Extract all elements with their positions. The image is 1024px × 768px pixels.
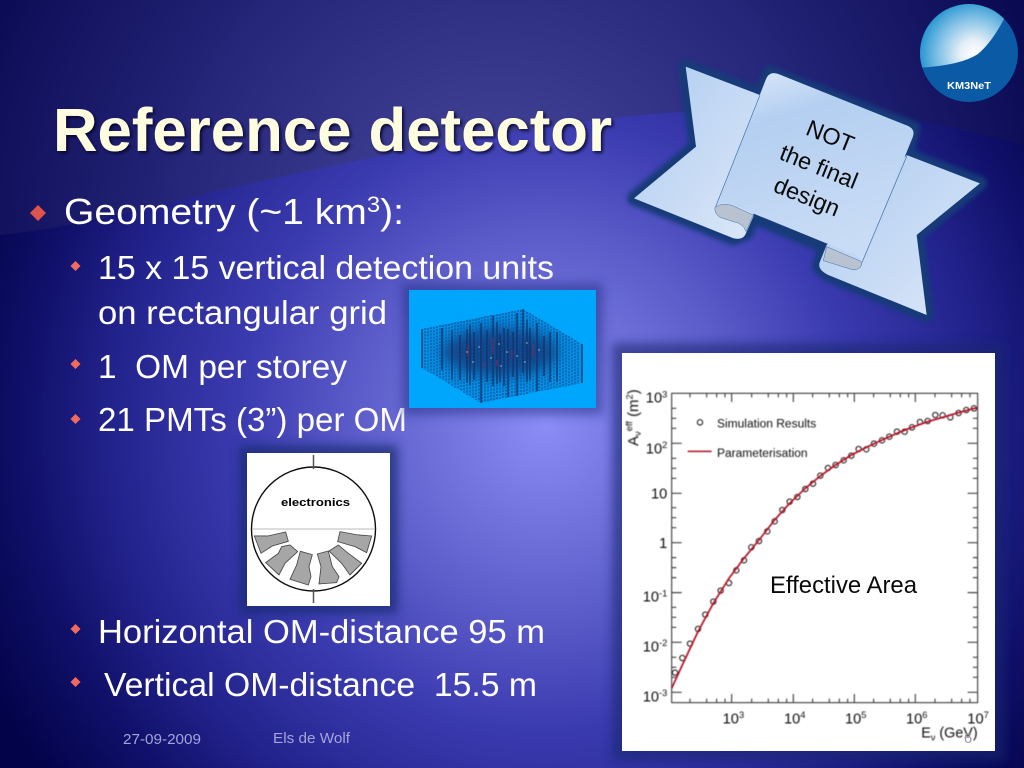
data points [672,406,977,675]
x axis labels [723,710,989,727]
x axis labels: 10 [967,711,984,727]
y axis title: eff [624,421,634,431]
sub-bullet: vertical distance: Vertical OM-distance 15.5 m [104,666,537,703]
logo: KM3NeT [915,0,1018,102]
sphere outline [252,455,376,603]
ribbon curl right [823,247,862,270]
ribbon text: NOT [803,115,858,157]
x axis title: ν [931,732,936,742]
ribbon text: design [770,172,844,221]
ribbon text: the final [776,139,862,194]
sub-bullet: vertical detection units [70,249,554,331]
bullet list [30,191,554,703]
y axis labels: 10 [651,487,667,503]
image: detector array [402,283,603,415]
x axis labels: 3 [739,710,744,720]
y axis title: (m [625,399,642,421]
legend: Simulation Results [717,417,816,431]
PMT blocks [254,532,372,585]
x axis labels: 10 [723,711,739,727]
footer: author: Els de Wolf [273,731,351,747]
y axis labels: 10 [646,441,662,457]
ribbon callout: NOT the final design [634,67,980,315]
sub-bullet: horizontal distance: Horizontal OM-distance 95 m [98,613,545,650]
image: optical module diagram [239,445,398,614]
y axis labels: 2 [662,440,667,450]
x axis labels: 5 [861,710,866,720]
label: electronics: electronics [281,497,350,509]
slide number: 6 [964,730,972,747]
y axis labels: 1 [659,536,667,552]
y axis labels: 10 [643,590,659,606]
title: Reference detector [53,96,612,164]
y axis labels: 3 [662,389,667,399]
ribbon right tail [819,155,980,315]
x axis labels: 10 [845,711,861,727]
y axis labels [643,389,667,705]
x axis labels: 7 [984,710,989,720]
ribbon text [770,115,862,221]
x axis labels: 4 [800,710,805,720]
parameterisation curve [672,408,977,688]
chart: effective area [612,343,1005,761]
y axis title: A [625,436,642,446]
x axis title: E [921,726,931,742]
y axis title: ν [633,431,643,436]
bullet: Geometry: Geometry (~1 km [64,191,343,232]
ribbon centre panel [716,73,914,263]
ribbon curl left [715,204,753,232]
y axis labels: 10 [643,639,659,655]
sub-bullet: OM per storey: 1 OM per storey [98,348,348,385]
y axis labels: -1 [659,588,667,598]
x axis labels: 10 [784,711,800,727]
footer: date: 27-09-2009 [123,732,201,748]
y axis title: ) [625,389,642,394]
bullet: Geometry: 3 [367,192,380,217]
ribbon left tail [634,67,760,239]
ribbon panel edges [716,95,907,263]
chart annotation: Effective Area [770,572,918,599]
sub-bullet: vertical detection units: on rectangular grid [98,294,387,331]
y axis labels: -2 [659,638,667,648]
plot frame and ticks [672,393,978,703]
bullet: Geometry: ): [380,191,404,232]
x axis labels: 6 [922,710,927,720]
y axis title: 2 [625,394,635,399]
sub-bullet: PMTs per OM: 21 PMTs (3”) per OM [98,401,407,438]
x axis labels: 10 [906,711,922,727]
logo: KM3NeT: KM3NeT [947,81,991,92]
ribbon glow [634,67,980,315]
x axis title: (GeV) [935,726,978,742]
y axis labels: -3 [659,688,667,698]
sub-bullet: vertical detection units: 15 x 15 vertical detection units [98,249,554,286]
y axis labels: 10 [643,689,659,705]
legend [688,417,816,460]
y axis labels: 10 [646,391,662,407]
legend: Parameterisation [717,446,808,460]
